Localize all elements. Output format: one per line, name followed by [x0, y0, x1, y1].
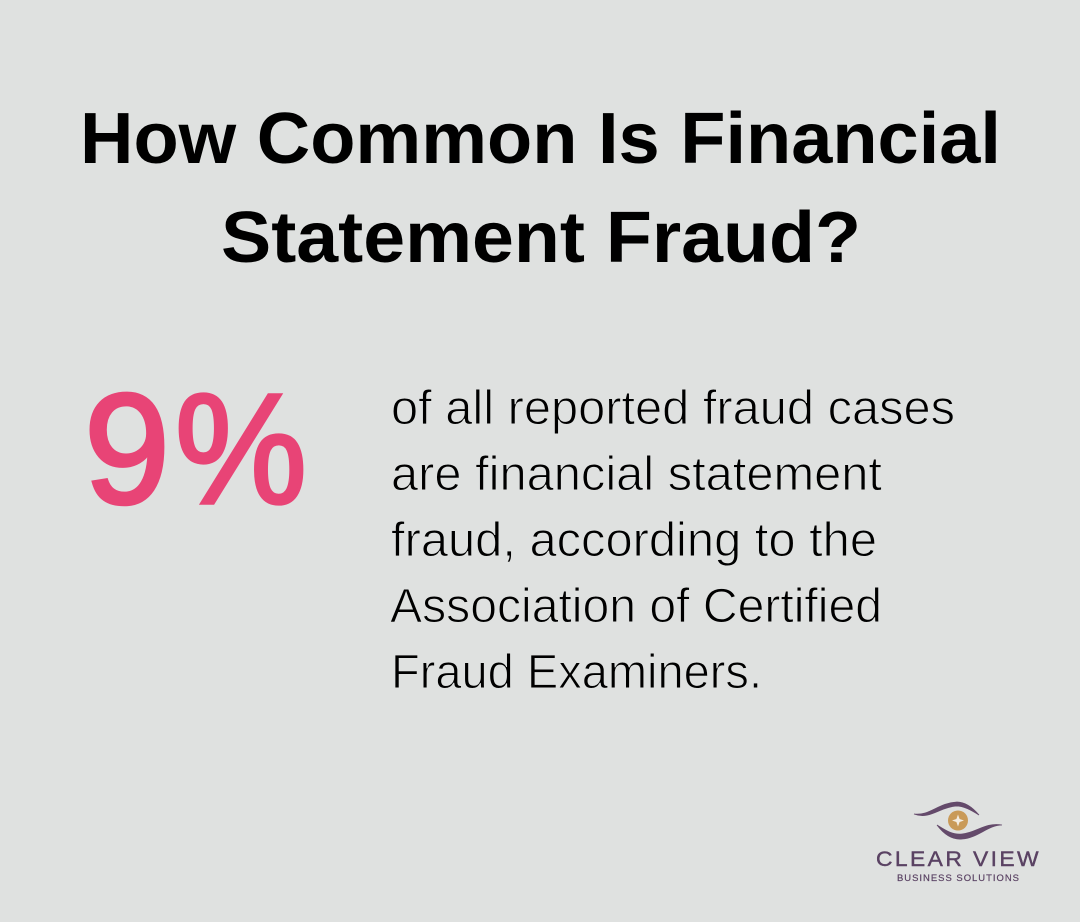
logo: Clear View Business Solutions [876, 802, 1041, 884]
icon: eye upper swoosh [914, 802, 979, 816]
logo tagline: BUSINESS SOLUTIONS [897, 873, 1020, 884]
icon: eye lower swoosh [937, 824, 1002, 839]
icon: star [952, 814, 964, 826]
statistic: 9%: % [175, 362, 307, 537]
title: How Common Is Financial [80, 99, 1001, 179]
description text: Fraud Examiners. [391, 646, 762, 699]
description text [390, 382, 955, 699]
description text: fraud, according to the [391, 514, 877, 567]
title [80, 99, 1001, 278]
description text: Association of Certified [390, 580, 882, 633]
statistic: 9% [84, 362, 307, 537]
statistic: 9%: 9 [84, 362, 170, 537]
icon: gold iris [948, 810, 968, 830]
description text: of all reported fraud cases [391, 382, 955, 435]
title: Statement Fraud? [221, 198, 861, 278]
description text: are financial statement [391, 448, 882, 501]
logo name: CLEAR VIEW [876, 848, 1041, 871]
